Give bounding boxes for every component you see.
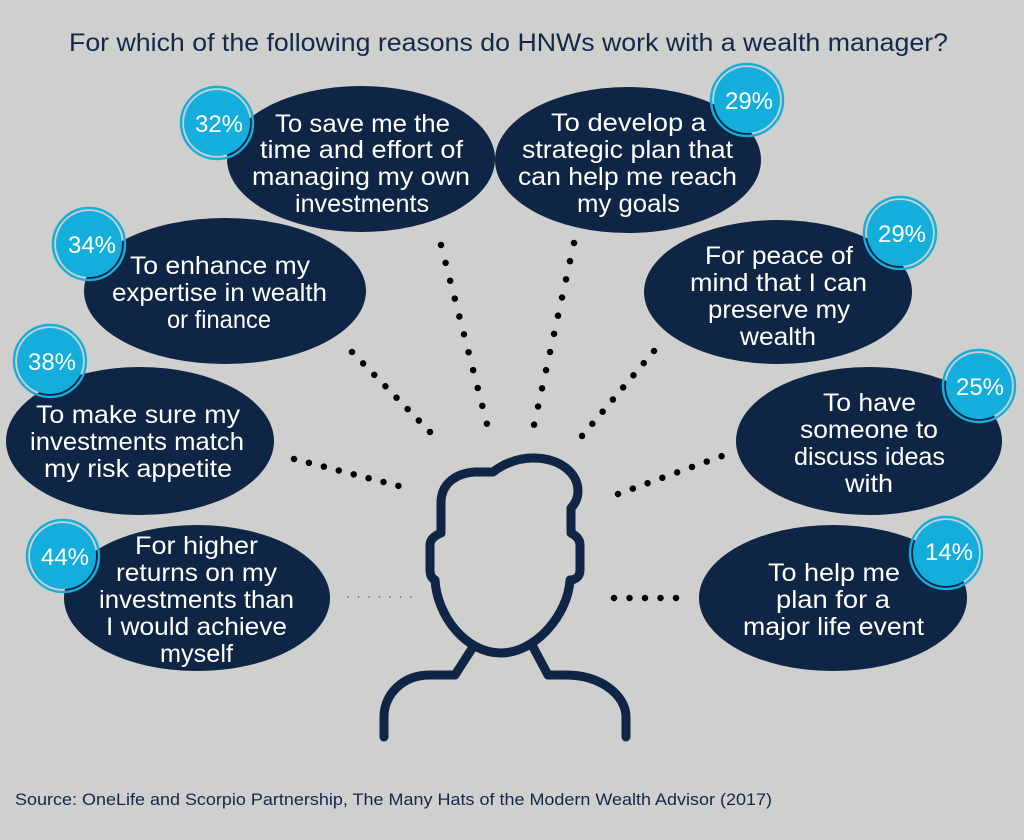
panel: peace of mind <box>644 220 912 364</box>
text: risk appetite: To make sure my <box>36 401 241 429</box>
badge: 14%: 14% <box>925 539 973 566</box>
text: risk appetite: investments match <box>30 428 244 456</box>
source note: Source: OneLife and Scorpio Partnership, The Many Hats of the Modern Wealth Advisor (2017) <box>15 791 772 809</box>
badge: 29% strategic plan <box>711 64 783 136</box>
text: peace of mind: mind that I can <box>690 269 867 297</box>
badge: 29% peace of mind <box>864 197 936 269</box>
text: strategic plan: strategic plan that <box>522 136 733 164</box>
text: major life event: plan for a <box>776 586 890 614</box>
text: strategic plan: my goals <box>577 190 680 218</box>
text: enhance expertise: expertise in wealth <box>112 279 327 307</box>
text: discuss ideas: To have <box>823 389 916 417</box>
badge: 29% strategic plan: 29% <box>725 88 773 115</box>
badge: 32% <box>181 87 253 159</box>
text: discuss ideas: discuss ideas <box>794 443 945 471</box>
text: major life event <box>743 559 924 641</box>
badge: 44% <box>27 520 99 592</box>
text: higher returns: myself <box>160 640 233 668</box>
badge: 25%: 25% <box>956 374 1004 401</box>
badge: 34%: 34% <box>68 232 116 259</box>
text: discuss ideas: someone to <box>800 416 938 444</box>
badge: 14% <box>910 517 982 589</box>
panel: major life event <box>699 525 967 671</box>
badge: 38% <box>14 325 86 397</box>
badge: 25% <box>943 350 1015 422</box>
text: peace of mind: preserve my <box>708 296 851 324</box>
badge: 34% <box>53 208 125 280</box>
text: strategic plan <box>518 109 737 218</box>
badge: 32%: 32% <box>195 111 243 138</box>
text: save time: managing my own <box>252 163 470 191</box>
badge: 44%: 44% <box>41 544 89 571</box>
icon: person outline <box>384 458 626 737</box>
text: save time: time and effort of <box>260 136 463 164</box>
panel: risk appetite <box>6 367 274 515</box>
text: higher returns: returns on my <box>116 559 278 587</box>
text: save time: To save me the <box>275 110 450 138</box>
text: enhance expertise <box>112 252 327 334</box>
text: peace of mind: wealth <box>739 323 816 351</box>
text: strategic plan: can help me reach <box>518 163 737 191</box>
title: For which of the following reasons do HNWs work with a wealth manager? <box>69 29 948 57</box>
text: save time <box>252 110 470 218</box>
text: major life event: To help me <box>768 559 900 587</box>
panel: enhance expertise <box>84 218 366 364</box>
text: higher returns: investments than <box>99 586 294 614</box>
panel: strategic plan <box>495 87 761 233</box>
panel: to save me the time <box>227 86 495 232</box>
text: discuss ideas: with <box>844 470 893 498</box>
text: discuss ideas <box>794 389 945 498</box>
text: higher returns: I would achieve <box>106 613 287 641</box>
text: higher returns <box>99 532 294 668</box>
badge: 38%: 38% <box>28 349 76 376</box>
panel: higher returns <box>64 525 330 671</box>
text: peace of mind <box>690 242 867 351</box>
text: higher returns: For higher <box>135 532 258 560</box>
text: risk appetite <box>30 401 244 483</box>
text: enhance expertise: or finance <box>167 306 271 334</box>
text: major life event: major life event <box>743 613 924 641</box>
text: save time: investments <box>295 190 429 218</box>
text: risk appetite: my risk appetite <box>44 455 232 483</box>
text: enhance expertise: To enhance my <box>130 252 311 280</box>
text: strategic plan: To develop a <box>551 109 706 137</box>
badge: 29% peace of mind: 29% <box>878 221 926 248</box>
panel: discuss ideas <box>736 367 1002 515</box>
dotted connectors <box>294 243 722 598</box>
text: peace of mind: For peace of <box>705 242 853 270</box>
